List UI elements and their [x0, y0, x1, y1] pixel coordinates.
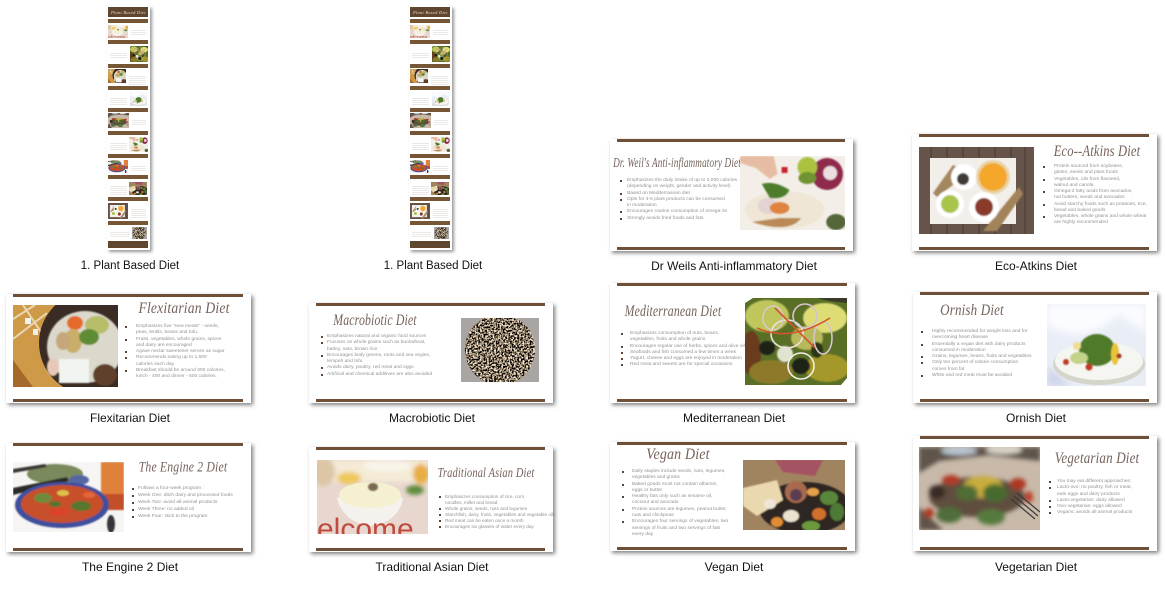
caption: Macrobiotic: Macrobiotic Diet [389, 411, 475, 425]
bullet list: Highly recommended for weight loss and for [932, 329, 1027, 334]
bullet list: Starchfish, dairy, fruits, vegetables and vegetable oils [445, 512, 555, 517]
caption: Plant Based Diet: 1. Plant Based Diet [81, 260, 179, 272]
bullet list: Encourages leafy greens, roots and sea vegies, [327, 353, 430, 358]
heading: Mediterranean Diet [625, 303, 721, 320]
bullet list: calories each day [136, 362, 174, 366]
bullet list: Omega-3 fatty acids from avocados, [1054, 189, 1133, 194]
bullet list: Opts for 4-6 plant products can be consumed [627, 197, 725, 202]
heading: Ornish Diet [940, 302, 1004, 319]
bullet list: noodles, millet and bread [445, 500, 497, 505]
heading: Vegan Diet [646, 446, 710, 463]
thumbnail header band: Plant Based Diet [413, 10, 448, 15]
photo: fig salad [743, 460, 845, 530]
bullet list: Vegetables, whole grains and whole wheat [1054, 214, 1146, 219]
bullet list: vegetables, fruits and whole grains [630, 337, 705, 342]
caption: Plant Based Diet copy: 1. Plant Based Diet [384, 260, 482, 272]
heading: Vegetarian Diet [1055, 450, 1139, 467]
photo: rice bowl [317, 460, 428, 534]
bullet list: Baked goods must not contain albumin, [632, 482, 718, 487]
bullet list: Lacto-vegetarian: dairy allowed [1057, 498, 1125, 503]
bullet list: Essentially a vegan diet with dairy products [932, 342, 1026, 346]
panel: Eco-Atkins Diet [912, 134, 1157, 251]
caption: Eco-Atkins: Eco-Atkins Diet [995, 259, 1077, 273]
bullet list: gluten, seeds and plant foods [1054, 170, 1118, 175]
bullet list: Focuses on whole grains such as buckwheat, [327, 340, 425, 345]
bullet list: Vegans: avoids all animal products [1057, 510, 1132, 515]
bullet list: eats eggs and dairy products [1057, 492, 1120, 496]
bullet list: Grains, legumes, beans, fruits and vegetables [932, 354, 1032, 359]
bullet list: Red meat can be eaten once a month [445, 518, 523, 523]
bullet list [439, 494, 556, 529]
bullet list: Avoids dairy, poultry, red meat and eggs [327, 365, 414, 370]
bullet list: Recommends eating up to 1,500 [136, 355, 207, 360]
bullet list: consumed in moderation [932, 348, 986, 353]
bullet list: Encourages routine consumption of omega-3s [627, 209, 727, 214]
bullet list: Emphasizes consumption of rice, corn, [445, 494, 526, 499]
panel: Traditional Asian Diet [309, 447, 553, 552]
bullet list: nuts and chickpeas [632, 513, 674, 518]
panel: The Engine 2 Diet [6, 443, 251, 552]
bullet list: Follows a four-week program : [138, 486, 204, 491]
caption: Vegetarian: Vegetarian Diet [995, 560, 1077, 574]
caption: Ornish: Ornish Diet [1006, 411, 1066, 425]
bullet list: White and red meat must be avoided [932, 373, 1012, 378]
bullet list: Daily staples include seeds, nuts, legumes, [632, 469, 726, 474]
bullet list: Encourages six glasses of water every day [445, 524, 534, 529]
bullet list: every day [632, 532, 653, 537]
bullet list: Encourages four servings of vegetables, two [632, 519, 728, 524]
bullet list: Emphasizes consumption of nuts, beans, [630, 331, 719, 336]
bullet list: overcoming heart disease [932, 335, 988, 340]
caption: Dr Weils: Dr Weils Anti-inflammatory Diet [651, 259, 817, 273]
bullet list: Emphasizes five "new meats" - seeds, [136, 324, 219, 329]
bullet list: Fruits, vegetables, whole grains, spices [136, 336, 221, 342]
bullet list: Based on Mediterranean diet [627, 190, 690, 196]
heading: Traditional Asian Diet [438, 465, 534, 480]
bullet list [620, 178, 737, 220]
bullet list: Strongly avoids fried foods and fats [627, 216, 703, 220]
bullet list: Encourages regular use of herbs, spices and olive oil [630, 344, 745, 348]
panel: Mediterranean Diet [610, 283, 855, 403]
bullet list: Only ten percent of calorie consumption [932, 360, 1018, 365]
panel: Plant Based Diet long thumbnail (right) [409, 6, 452, 250]
bullet list: Protein sources are legumes, peanut butter, [632, 507, 727, 512]
panel: Dr Weil's Anti-inflammatory Diet [610, 139, 853, 251]
heading: The Engine 2 Diet [139, 460, 227, 476]
bullet list: are highly recommended [1054, 220, 1108, 225]
bullet list: barley, oats, brown rice [327, 346, 377, 352]
bullet list: vegetables and grains [632, 475, 680, 480]
caption: Engine 2: The Engine 2 Diet [82, 560, 178, 574]
bullet list: Week Three: no added oil [138, 507, 194, 512]
bullet list [321, 334, 432, 376]
caption: Traditional Asian: Traditional Asian Diet [376, 560, 488, 574]
photo: blurred plate with fork [919, 447, 1040, 530]
bullet list [621, 330, 745, 367]
bullet list: Vegetables, oils from flaxseed, [1054, 176, 1120, 182]
bullet list: coconut and avocado [632, 500, 678, 505]
bullet list: comes from fat [932, 366, 964, 372]
bullet list: Protein sourced from soybeans, [1054, 164, 1123, 169]
bullet list: tempeh and tofu [327, 359, 362, 364]
photo: salad platter [13, 462, 124, 532]
bullet list: Week Four: stick to the program [138, 514, 208, 519]
bullet list: Ovo-vegetarian: eggs allowed [1057, 504, 1122, 509]
heading: Eco--Atkins Diet [1054, 143, 1140, 160]
photo: seeds [461, 318, 539, 382]
bullet list: Lacto-ovo: no poultry, fish or meat, [1057, 485, 1132, 490]
bullet list [622, 468, 728, 537]
bullet list: Emphasizes natural and organic food sources [327, 334, 426, 339]
bullet list: Breakfast should be around 300 calories, [136, 368, 225, 373]
bullet list: Healthy fats only such as sesame oil, [632, 494, 712, 499]
bullet list: Avoid starchy foods such as potatoes, rice, [1054, 202, 1147, 206]
panel: Vegetarian Diet [913, 436, 1157, 551]
bullet list: lunch - 400 and dinner - 500 calories. [136, 374, 217, 379]
panel: Ornish Diet [913, 292, 1157, 403]
bullet list [132, 486, 233, 519]
bullet list: Yogurt, cheese and eggs are enjoyed in moderation [630, 356, 742, 361]
bullet list [1043, 164, 1147, 225]
panel: Macrobiotic Diet [309, 303, 553, 403]
bullet list: Week One: ditch dairy and processed foods [138, 493, 233, 498]
thumbnail header band: Plant Based Diet [111, 10, 146, 15]
caption: Mediterranean: Mediterranean Diet [683, 411, 785, 425]
bullet list: Emphasizes the daily intake of up to 3,000 calories [627, 178, 737, 183]
bullet list: in moderation [627, 203, 657, 208]
bullet list: Seafoods and fish consumed a few times a week [630, 350, 736, 355]
bullet list: Week Two: avoid all-animal products [138, 500, 217, 505]
bullet list: Artificial and chemical additives are also avoided [327, 372, 432, 376]
bullet list: eggs or butter [632, 488, 662, 493]
bullet list [125, 324, 225, 379]
photo: salad on plate [1047, 304, 1146, 386]
photo: wrap salad [740, 156, 845, 230]
bullet list: Whole grains, seeds, nuts and legumes [445, 506, 527, 511]
bullet list: nut butters, seeds and avocados [1054, 195, 1125, 200]
thumbnail header band [410, 7, 450, 17]
bullet list: walnut and canola [1054, 183, 1093, 188]
bullet list [921, 328, 1032, 378]
bullet list: Agave nectar sweetener serves as sugar [136, 349, 225, 354]
bullet list: Red meat and sweets are for special occasions [630, 362, 732, 367]
photo: plate on wood [919, 147, 1034, 234]
caption: Vegan: Vegan Diet [705, 560, 763, 574]
bullet list: peas, lentils, beans and tofu. [136, 330, 198, 335]
bullet list [1049, 478, 1132, 515]
bullet list: You may eat different approaches: [1057, 479, 1131, 484]
panel: Flexitarian Diet [6, 294, 251, 403]
panel: Vegan Diet [610, 442, 855, 551]
heading: Dr. Weil's Anti-inflammatory Diet [613, 155, 741, 170]
heading: Macrobiotic Diet [333, 312, 417, 329]
caption: Flexitarian: Flexitarian Diet [90, 411, 170, 425]
bullet list: (depending on weight, gender and activity level) [627, 184, 731, 189]
bullet list: bread and baked goods [1054, 208, 1105, 213]
heading: Flexitarian Diet [138, 300, 230, 317]
photo: hot pot [13, 305, 118, 387]
bullet list: servings of fruits and two servings of fats [632, 526, 720, 531]
panel: Plant Based Diet long thumbnail (left) [107, 6, 150, 250]
photo: salad [745, 298, 847, 385]
bullet list: and dairy are encouraged [136, 343, 192, 348]
thumbnail header band [108, 7, 148, 17]
